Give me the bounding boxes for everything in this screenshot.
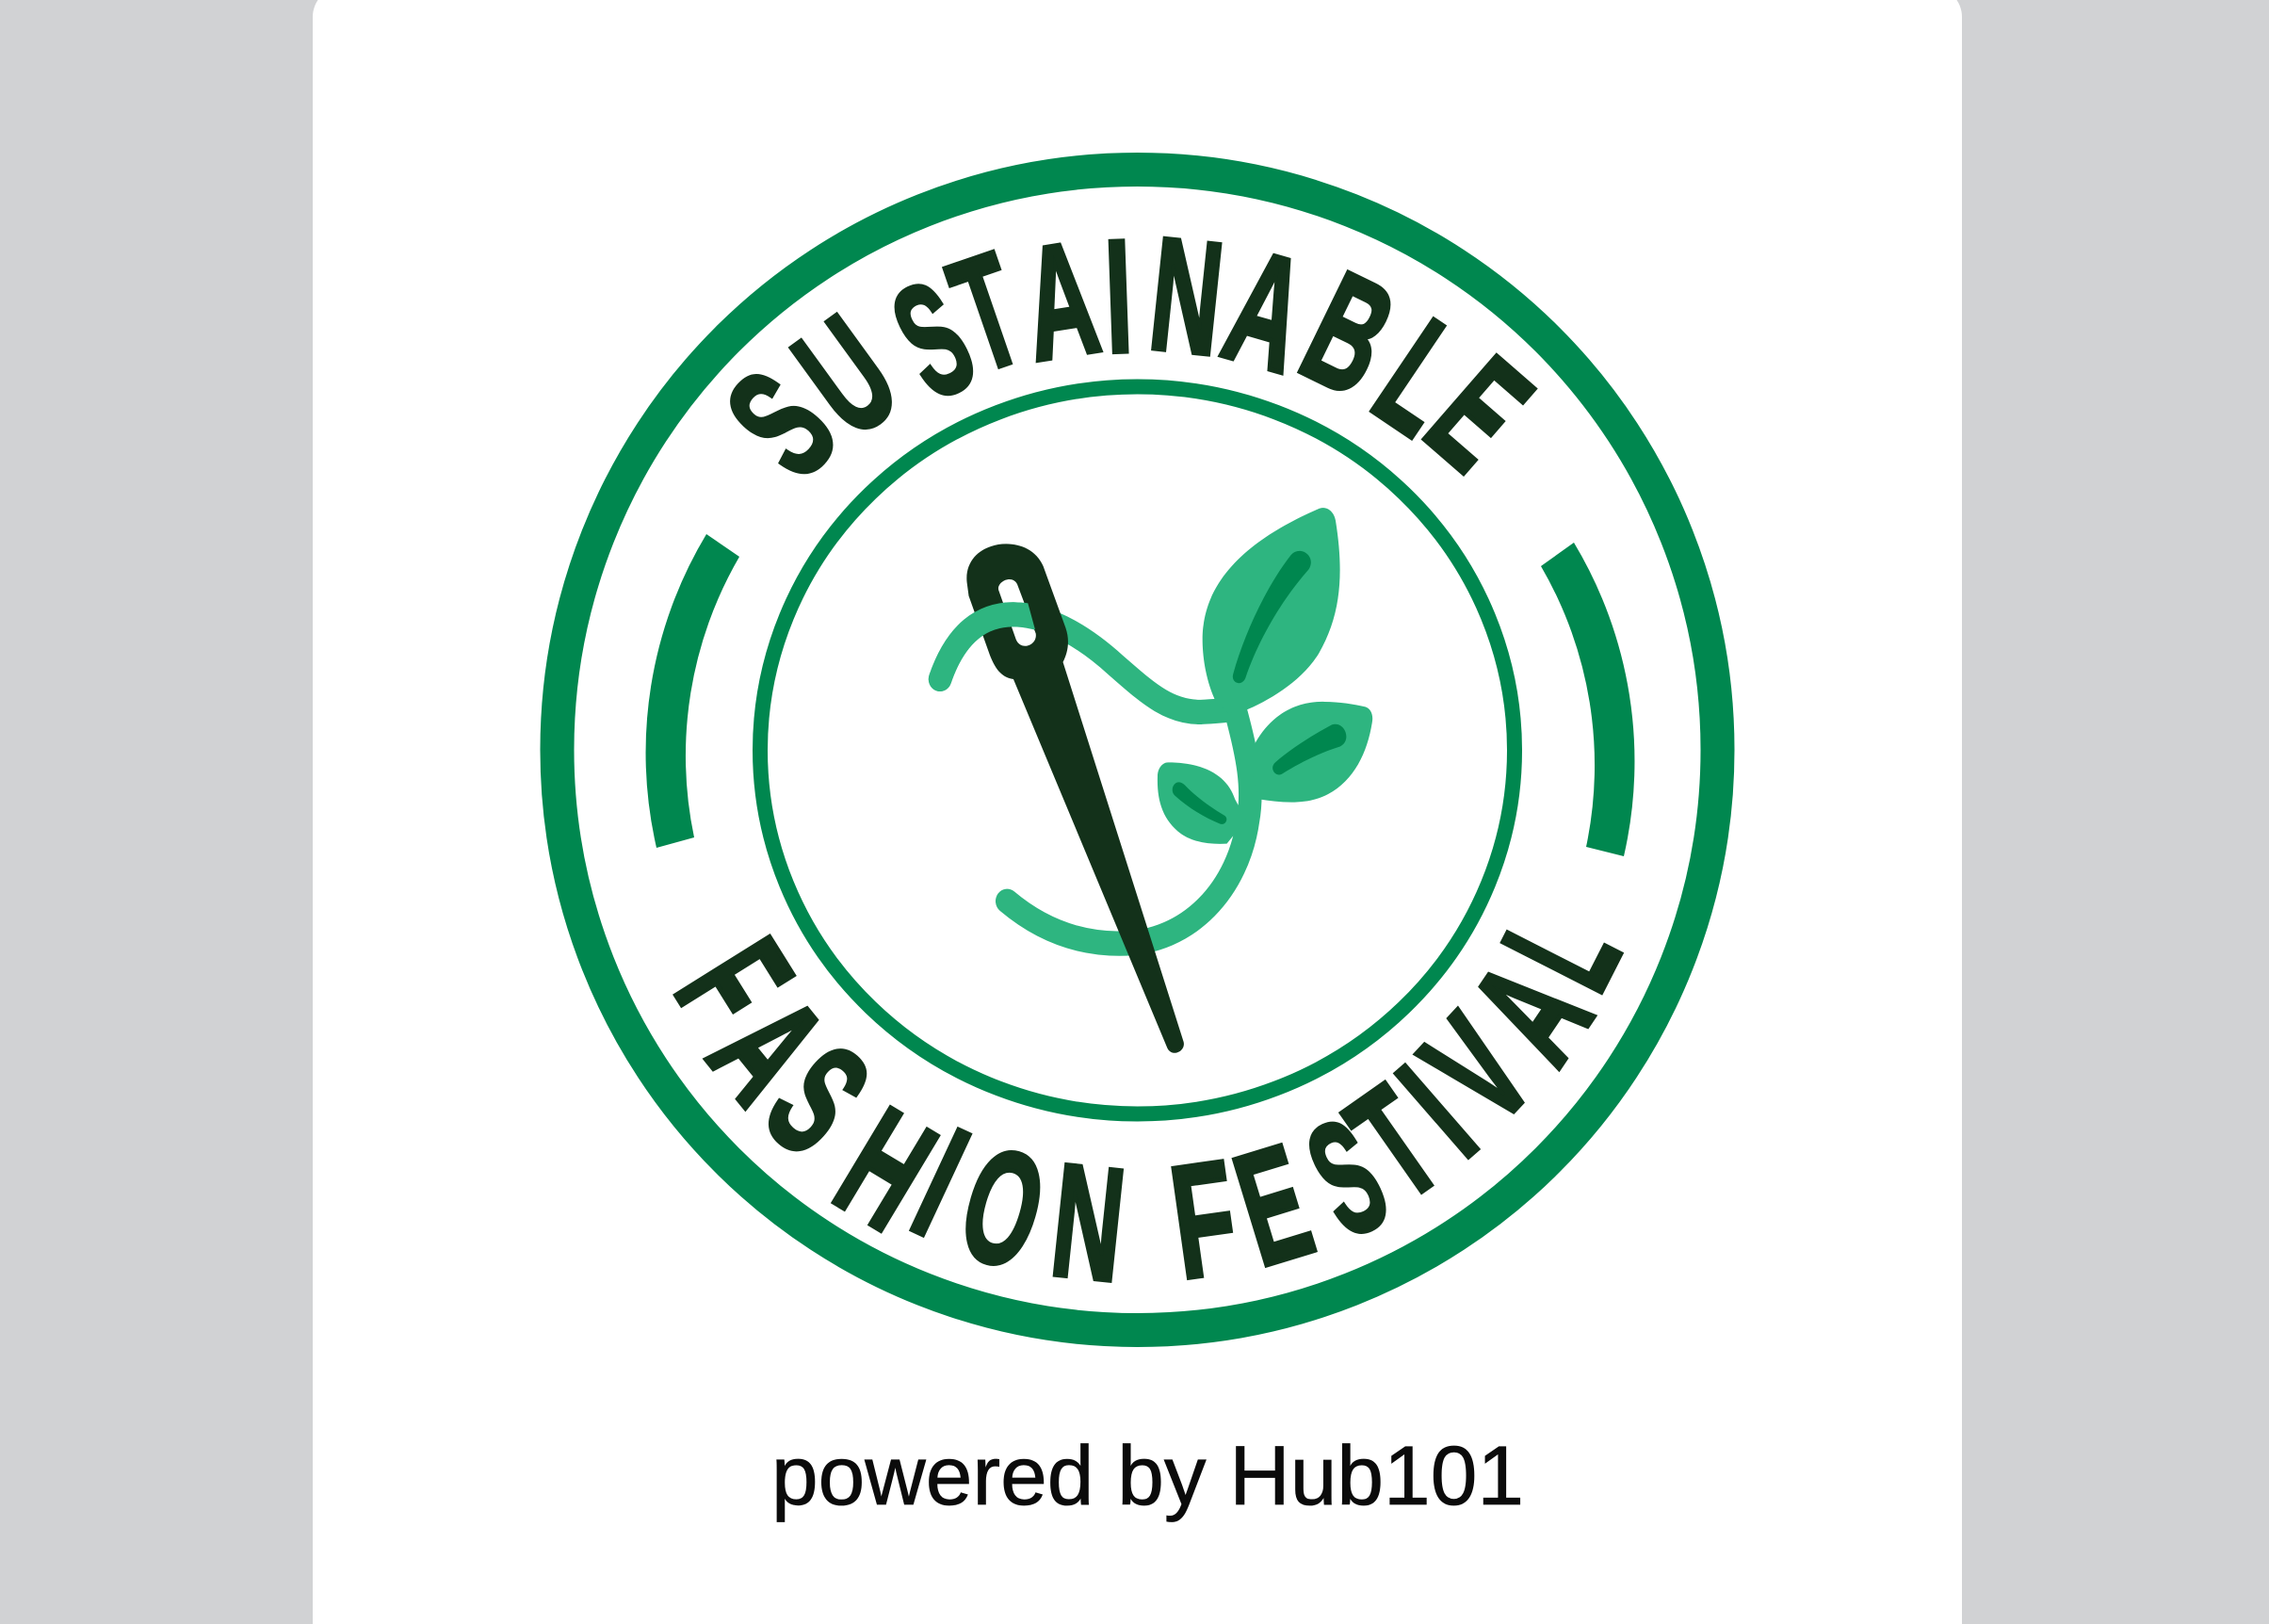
heading: FASHION FESTIVAL: H: [810, 1074, 962, 1264]
thread and stem: [940, 614, 1250, 944]
heading: SUSTAINABLE: L: [1347, 286, 1496, 468]
text: powered by Hub101: powered by Hub101: [771, 1428, 1524, 1522]
inner ring: [760, 386, 1515, 1113]
heading: FASHION FESTIVAL: I: [891, 1096, 991, 1269]
icon: needle, thread and leaves: [929, 508, 1372, 1053]
large leaf vein: [1233, 551, 1311, 683]
heading: FASHION FESTIVAL: [642, 885, 1654, 1315]
heading: FASHION FESTIVAL: T: [1320, 1053, 1469, 1233]
heading: FASHION FESTIVAL: A: [1437, 933, 1625, 1091]
heading: FASHION FESTIVAL: F: [1161, 1128, 1247, 1313]
heading: FASHION FESTIVAL: E: [1217, 1111, 1329, 1300]
heading: FASHION FESTIVAL: S: [735, 1012, 901, 1187]
heading: FASHION FESTIVAL: S: [1284, 1084, 1410, 1271]
logo badge: [558, 170, 1718, 1330]
heading: SUSTAINABLE: [693, 203, 1563, 509]
outer ring: [558, 170, 1718, 1330]
heading: SUSTAINABLE: E: [1396, 325, 1563, 502]
thread through needle eye: [940, 614, 1049, 679]
right leaf: [1252, 702, 1372, 803]
heading: FASHION FESTIVAL: O: [944, 1112, 1062, 1305]
heading: FASHION FESTIVAL: I: [1368, 1034, 1505, 1188]
heading: SUSTAINABLE: A: [1013, 206, 1109, 395]
heading: SUSTAINABLE: S: [693, 339, 868, 509]
left leaf: [1158, 762, 1246, 844]
heading: SUSTAINABLE: N: [1143, 203, 1231, 389]
heading: FASHION FESTIVAL: V: [1389, 984, 1564, 1154]
heading: SUSTAINABLE: T: [932, 219, 1042, 407]
left leaf vein: [1173, 782, 1226, 824]
heading: FASHION FESTIVAL: A: [677, 966, 860, 1132]
right arc accent: [1541, 543, 1634, 856]
large leaf: [1203, 508, 1340, 713]
heading: SUSTAINABLE: S: [868, 246, 998, 432]
heading: FASHION FESTIVAL: F: [642, 912, 825, 1056]
left arc accent: [646, 534, 739, 848]
thread end cap: [929, 667, 951, 691]
heading: SUSTAINABLE: U: [766, 283, 927, 469]
panel: white card: [313, 0, 1962, 1624]
right leaf vein: [1272, 724, 1346, 774]
needle: [966, 544, 1184, 1053]
heading: SUSTAINABLE: B: [1278, 238, 1419, 430]
heading: FASHION FESTIVAL: L: [1469, 885, 1654, 1015]
heading: SUSTAINABLE: I: [1102, 206, 1135, 386]
heading: SUSTAINABLE: A: [1208, 215, 1324, 407]
heading: FASHION FESTIVAL: N: [1045, 1129, 1132, 1315]
